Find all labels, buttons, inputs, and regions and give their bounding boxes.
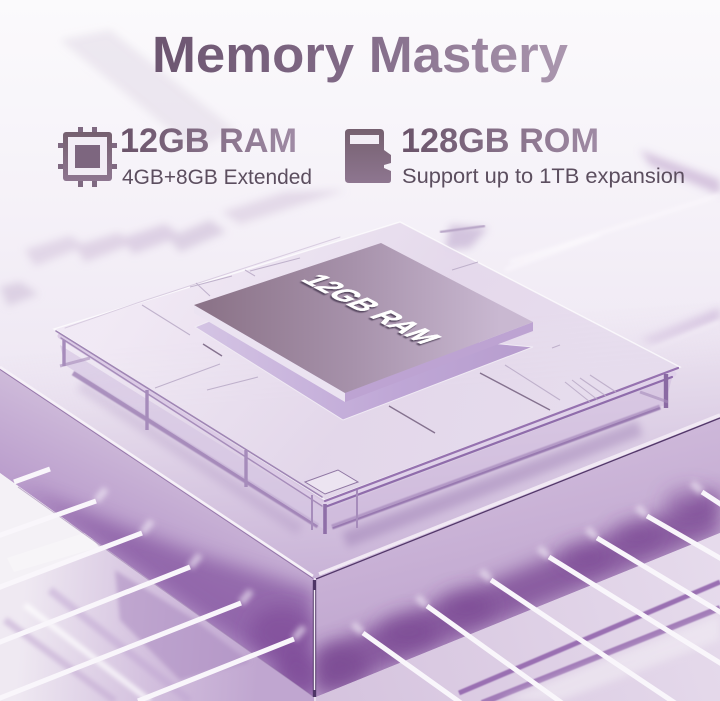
streak end glows bbox=[96, 483, 702, 639]
ROM heading: 128GB ROM bbox=[401, 122, 599, 160]
base block right floor with dark stripes bbox=[316, 533, 720, 701]
chip label: 12GB RAM bbox=[293, 271, 449, 347]
base block top surface bbox=[0, 250, 720, 578]
board top surface bbox=[54, 222, 680, 500]
glass board bbox=[54, 222, 680, 534]
ROM detail: Support up to 1TB expansion bbox=[402, 165, 685, 188]
RAM detail: 4GB+8GB Extended bbox=[122, 166, 312, 189]
base block left face bbox=[0, 368, 326, 699]
white light streaks left bbox=[0, 469, 294, 701]
board legs bbox=[60, 340, 668, 534]
base block left floor with pale bars bbox=[0, 473, 314, 701]
board corner square bbox=[305, 470, 358, 494]
RAM heading: 12GB RAM bbox=[120, 122, 297, 160]
board circuit traces bbox=[142, 258, 616, 402]
block edges bbox=[0, 367, 720, 697]
blurred background circuit shapes bbox=[0, 30, 720, 385]
glass board shadow on block bbox=[73, 373, 660, 540]
title: Memory Mastery bbox=[152, 26, 569, 83]
icon: processor chip bbox=[58, 127, 117, 187]
board outline bbox=[54, 222, 680, 500]
base block right face bbox=[312, 417, 720, 697]
board side walls bbox=[60, 345, 325, 530]
memory chip bbox=[194, 243, 533, 402]
board front rims bbox=[56, 237, 678, 507]
white light streaks right bbox=[363, 492, 720, 701]
memory chip lower layer bbox=[195, 318, 533, 420]
icon: memory card bbox=[345, 129, 391, 183]
